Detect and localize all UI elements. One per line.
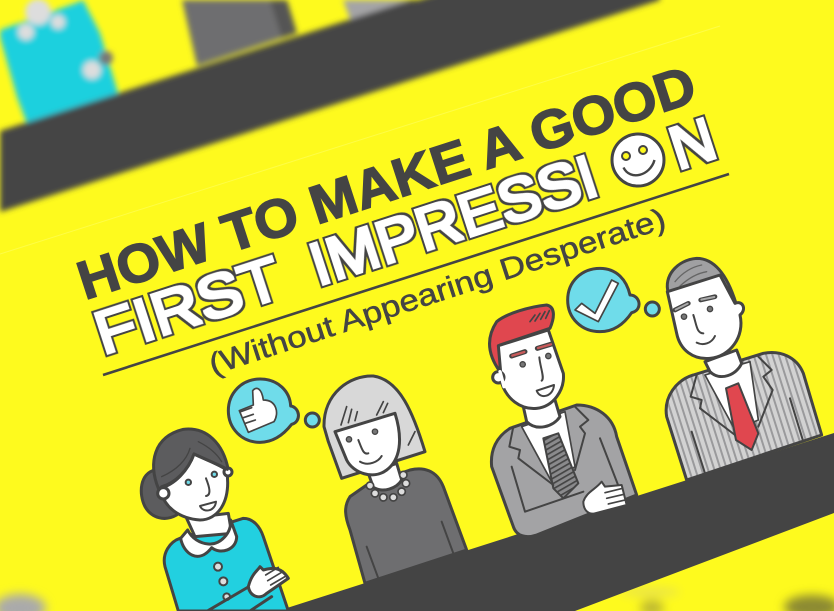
- thought bubble: check mark: [568, 268, 659, 332]
- character: woman with bun: [141, 429, 288, 611]
- arm lines: [692, 398, 803, 473]
- bun: [141, 470, 177, 518]
- nose: [358, 440, 368, 454]
- arm: [207, 585, 272, 611]
- face: [335, 413, 400, 475]
- title: [70, 55, 729, 382]
- eyes: [681, 314, 687, 319]
- hair: [154, 429, 228, 493]
- thought bubble: thumbs up: [228, 379, 319, 442]
- hair: [667, 258, 736, 303]
- smile: [697, 336, 715, 344]
- character: man with red tie: [666, 258, 822, 480]
- hand: [248, 567, 288, 597]
- lapels: [691, 357, 773, 435]
- buttons: [214, 563, 222, 571]
- tie: [726, 383, 758, 450]
- neck: [705, 350, 742, 377]
- jacket: [666, 352, 822, 480]
- right characters: [490, 258, 822, 537]
- neck: [368, 463, 402, 490]
- nose: [206, 478, 209, 496]
- blouse: [164, 518, 288, 611]
- title underline: [103, 174, 729, 375]
- shirt: [705, 362, 758, 430]
- eyes: [346, 437, 352, 442]
- hair: [324, 376, 425, 478]
- eyes: [520, 362, 525, 367]
- face: [159, 454, 228, 520]
- tie: [543, 433, 578, 498]
- title line 2: last letter: N: [661, 105, 724, 182]
- hair: [490, 305, 553, 372]
- bottom table bar: [270, 433, 834, 611]
- shirt: [522, 412, 575, 482]
- hair strands: [162, 442, 222, 477]
- title line 1: HOW TO MAKE A GOOD: [70, 55, 703, 311]
- character: red-haired man: [490, 305, 637, 537]
- left characters: [141, 376, 467, 611]
- brows: [512, 344, 552, 356]
- neck: [187, 513, 232, 537]
- lapels: [509, 407, 588, 485]
- collar: [181, 520, 237, 556]
- smile: [360, 456, 382, 464]
- icon: smiley letter O: [612, 134, 664, 186]
- sweater: [346, 469, 467, 583]
- face: [667, 275, 744, 359]
- neck: [523, 400, 560, 427]
- mouth: [200, 502, 216, 511]
- check: [575, 280, 618, 322]
- ear: [493, 372, 504, 383]
- fringe lines: [341, 402, 415, 445]
- eyes: [186, 480, 191, 485]
- blurred bottom strip: next section: [0, 588, 834, 611]
- ears: [158, 488, 169, 499]
- title line 2: first word: FIRST: [86, 244, 290, 367]
- arm lines: [512, 438, 620, 512]
- brows: [675, 297, 715, 310]
- arm lines: [367, 522, 453, 578]
- title line 2: second word: IMPRESSI: [301, 143, 605, 298]
- subtitle: (Without Appearing Desperate): [205, 203, 670, 382]
- character: woman with grey bob: [324, 376, 467, 583]
- blurred top strip: previous section: [0, 0, 660, 212]
- faint crease line: [0, 26, 720, 254]
- mouth: [537, 385, 554, 396]
- necklace: [366, 471, 410, 501]
- nose: [539, 357, 543, 381]
- face: [498, 330, 563, 408]
- jacket: [491, 405, 637, 537]
- nose: [693, 315, 703, 333]
- hand: [583, 482, 627, 514]
